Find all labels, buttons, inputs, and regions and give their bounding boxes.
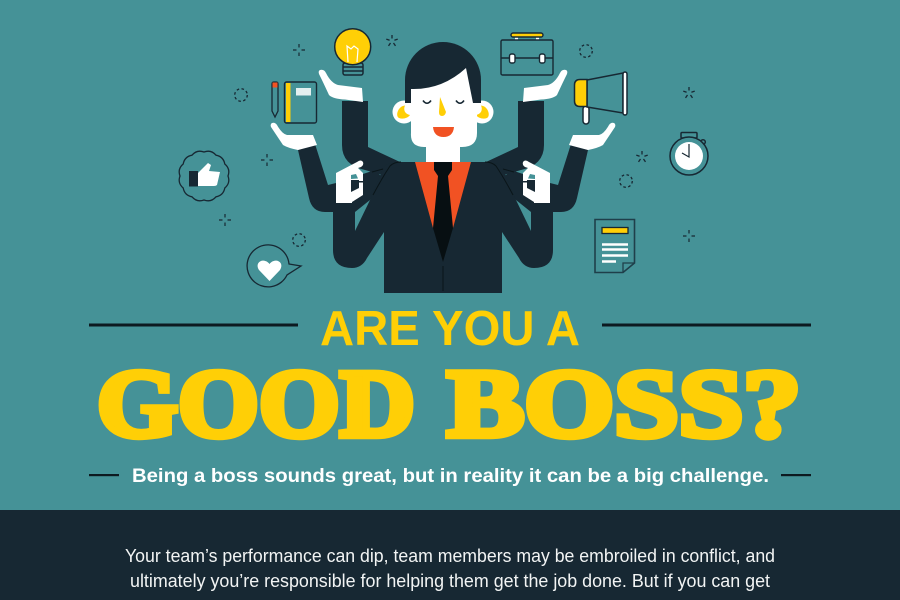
icon: briefcase bbox=[501, 33, 553, 75]
title: are you a bbox=[89, 302, 811, 356]
decorative ring: far left bbox=[235, 89, 247, 101]
title: good boss: BOSS? bbox=[447, 350, 801, 457]
necktie bbox=[433, 162, 453, 262]
dark intro band background bbox=[0, 510, 900, 600]
back arm right bbox=[486, 70, 615, 212]
shirt collar bbox=[415, 162, 471, 228]
left ear bbox=[392, 100, 416, 124]
intro paragraph: Your team’s performance can dip, team members may be embroiled in conflict, and bbox=[125, 546, 775, 566]
decorative sparkle: lower left bbox=[219, 214, 231, 226]
back arm left bbox=[271, 70, 400, 212]
decorative sparkle: mid left bbox=[261, 154, 273, 166]
decorative sparkle: top left bbox=[293, 44, 305, 56]
intro paragraph: ultimately you’re responsible for helping them get the job done. But if you can get bbox=[130, 571, 770, 591]
mouth bbox=[433, 127, 454, 137]
right lapel line bbox=[485, 162, 514, 195]
title: good boss bbox=[97, 350, 801, 457]
title: are you a: ARE YOU A bbox=[320, 302, 580, 356]
title: good boss: GOOD bbox=[97, 350, 415, 457]
decorative sparkle: far right bbox=[683, 87, 695, 98]
icon: light bulb bbox=[335, 29, 371, 75]
nose bbox=[439, 97, 446, 116]
front hand left bbox=[336, 160, 363, 203]
left lapel line bbox=[372, 162, 401, 195]
decorative sparkle: lower right bbox=[683, 230, 695, 242]
face bbox=[411, 68, 477, 147]
subtitle: Being a boss sounds great, but in reality it can be a big challenge. bbox=[132, 465, 769, 487]
front hand right bbox=[523, 160, 550, 203]
icon: thumbs up badge bbox=[179, 151, 229, 201]
icon: notebook bbox=[284, 82, 316, 123]
decorative sparkle: above head bbox=[386, 35, 398, 46]
hair bbox=[405, 42, 481, 103]
decorative ring: lower left bbox=[293, 234, 305, 246]
intro paragraph bbox=[125, 546, 775, 591]
eyes bbox=[423, 100, 464, 103]
decorative sparkle: mid right bbox=[636, 151, 648, 162]
icon: heart speech bubble bbox=[247, 245, 301, 287]
icon: megaphone bbox=[574, 72, 627, 124]
icon: stopwatch bbox=[670, 132, 708, 175]
suit centre seam bbox=[442, 266, 444, 291]
decorative ring: top right bbox=[580, 45, 592, 57]
icon: document bbox=[595, 220, 634, 272]
suit with front arms bbox=[333, 162, 553, 293]
icon: pencil bbox=[272, 82, 278, 117]
illustration: boss with six arms bbox=[271, 42, 615, 293]
right ear bbox=[470, 100, 494, 124]
neck bbox=[426, 145, 460, 162]
decorative ring: mid right bbox=[620, 175, 632, 187]
